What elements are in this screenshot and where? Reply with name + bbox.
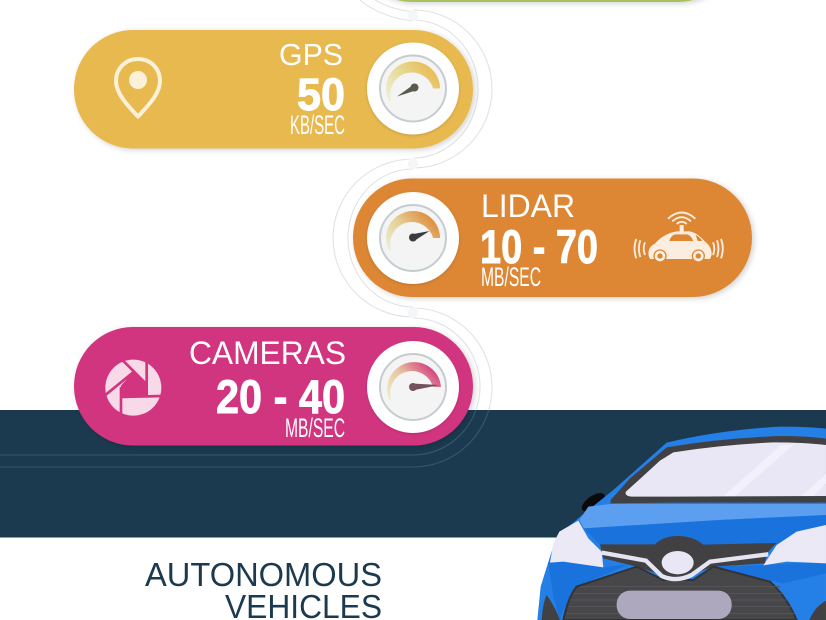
GPS label: GPS xyxy=(279,37,343,72)
GPS unit: KB/SEC xyxy=(290,110,345,140)
gauge: LIDAR xyxy=(367,192,459,284)
heading: Autonomous Vehicles: AUTONOMOUS xyxy=(145,556,382,593)
panel: Cameras xyxy=(74,327,473,446)
gauge: GPS xyxy=(367,42,459,134)
dark band xyxy=(0,410,826,538)
panel: LIDAR xyxy=(353,178,752,297)
GPS value: 50 xyxy=(297,69,345,120)
Cameras value: 20 - 40 xyxy=(216,370,345,423)
Cameras label: CAMERAS xyxy=(189,335,346,371)
icon: camera shutter xyxy=(103,360,163,417)
LIDAR label: LIDAR xyxy=(481,188,575,224)
Cameras unit: MB/SEC xyxy=(285,413,345,443)
icon: autonomous car xyxy=(634,212,723,263)
LIDAR pill background xyxy=(353,178,752,297)
illustration: blue car xyxy=(537,427,826,620)
icon: map pin xyxy=(116,59,160,116)
Cameras pill background xyxy=(74,327,473,446)
panel: GPS xyxy=(74,30,473,148)
gauge: Cameras xyxy=(367,341,459,433)
LIDAR value: 10 - 70 xyxy=(480,220,598,273)
heading: Autonomous Vehicles xyxy=(145,556,382,620)
LIDAR unit: MB/SEC xyxy=(481,262,541,292)
connector lines xyxy=(0,0,492,467)
panel: green sensor pill (cropped) xyxy=(353,0,737,2)
GPS pill background xyxy=(74,30,473,148)
